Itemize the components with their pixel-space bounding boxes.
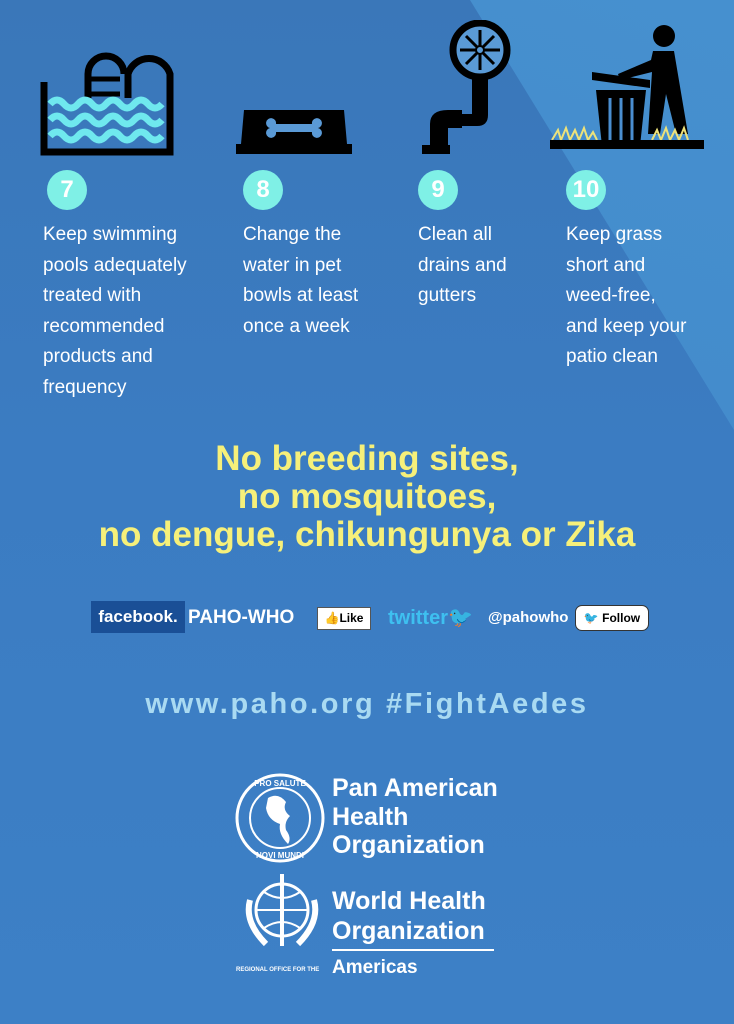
tip 9 text: gutters xyxy=(418,285,476,306)
PAHO-WHO label: PAHO-WHO xyxy=(188,607,294,628)
tip 10 text: and keep your xyxy=(566,316,686,336)
website and hashtag: www.paho.org #FightAedes xyxy=(145,688,589,720)
icon: swimming pool xyxy=(40,52,174,156)
tip 8 text: water in pet xyxy=(243,254,341,276)
PAHO emblem xyxy=(236,774,324,862)
handle: @pahowho xyxy=(488,609,568,626)
WHO rule xyxy=(332,949,494,951)
tip 10 text: Keep grass xyxy=(566,224,662,245)
PAHO logo xyxy=(236,774,498,862)
tip 7 text: products and xyxy=(43,346,153,367)
facebook badge xyxy=(91,601,185,633)
follow button: 🐦 Follow xyxy=(584,611,640,625)
number badge 8 xyxy=(243,170,283,210)
tip 10 text xyxy=(566,224,686,367)
tip 7 text xyxy=(43,224,187,398)
WHO name: World Health xyxy=(332,887,486,915)
tip 10 text: weed-free, xyxy=(566,285,656,306)
like button xyxy=(317,607,371,630)
like button: 👍Like xyxy=(325,611,363,625)
PAHO emblem: PRO SALUTE xyxy=(254,779,306,788)
PAHO name: Health xyxy=(332,802,408,830)
WHO name xyxy=(332,887,486,945)
twitter label: twitter🐦 xyxy=(388,607,473,629)
slogan: no dengue, chikungunya or Zika xyxy=(99,515,635,554)
tip 8 text: bowls at least xyxy=(243,285,358,306)
icon: pet bowl xyxy=(236,110,352,154)
tip 10 text: short and xyxy=(566,254,645,276)
number badge 8: 8 xyxy=(256,176,270,203)
PAHO emblem: NOVI MUNDI xyxy=(256,851,304,860)
tip 9 text xyxy=(418,224,507,306)
follow button xyxy=(575,605,649,631)
number badge 7: 7 xyxy=(60,176,74,203)
WHO logo xyxy=(236,874,494,978)
PAHO name: Pan American xyxy=(332,774,498,802)
WHO name: Organization xyxy=(332,917,485,945)
PAHO name xyxy=(332,774,498,859)
tip 7 text: treated with xyxy=(43,285,141,306)
social bar xyxy=(91,601,649,633)
tip 8 text: Change the xyxy=(243,224,341,245)
regional office: REGIONAL OFFICE FOR THE xyxy=(236,967,319,973)
PAHO name: Organization xyxy=(332,831,485,859)
tip 9 text: Clean all xyxy=(418,224,492,245)
tip 9 text: drains and xyxy=(418,254,507,276)
slogan: No breeding sites, xyxy=(215,439,519,478)
Americas: Americas xyxy=(332,957,418,978)
number badge 9 xyxy=(418,170,458,210)
tip 10 text: patio clean xyxy=(566,346,658,367)
slogan: no mosquitoes, xyxy=(238,477,496,516)
tip 7 text: frequency xyxy=(43,376,126,398)
icon: trash and person xyxy=(550,25,704,149)
number badge 10: 10 xyxy=(573,176,599,203)
number badge 9: 9 xyxy=(431,176,445,203)
tip 7 text: pools adequately xyxy=(43,254,187,276)
facebook badge: facebook. xyxy=(98,607,178,626)
slogan xyxy=(99,439,636,554)
number badge 7 xyxy=(47,170,87,210)
tip 8 text: once a week xyxy=(243,316,350,336)
tip 7 text: Keep swimming xyxy=(43,224,177,245)
number badge 10 xyxy=(566,170,606,210)
WHO emblem xyxy=(246,874,318,946)
icon: drain pipe xyxy=(422,20,510,154)
tip 8 text xyxy=(243,224,358,336)
tip 7 text: recommended xyxy=(43,316,164,336)
